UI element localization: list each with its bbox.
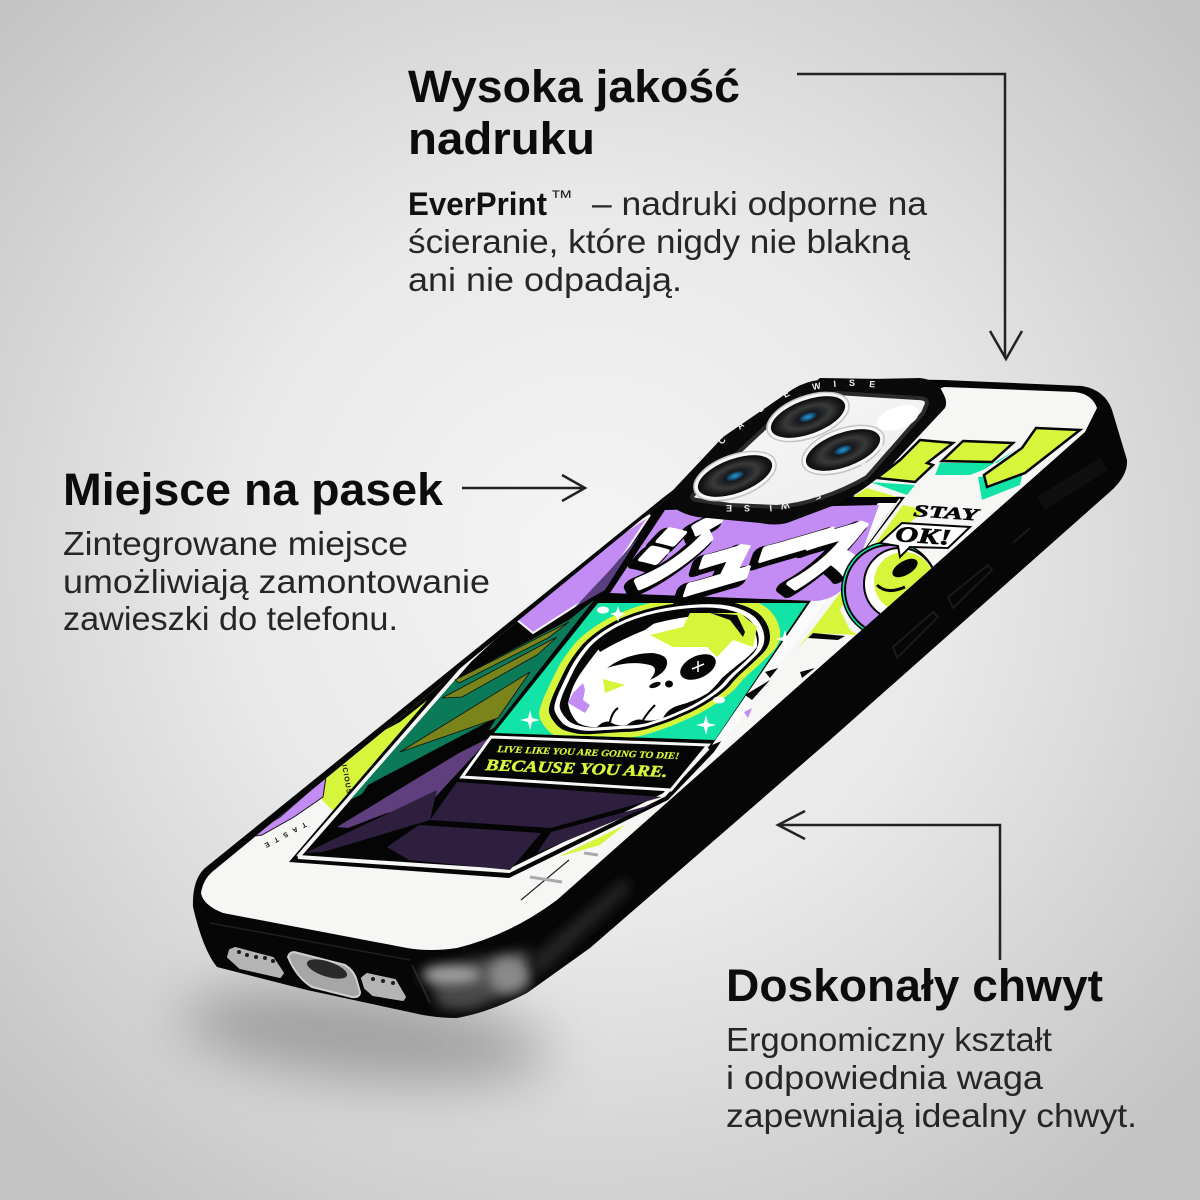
heading: print quality: nadruku (408, 113, 595, 164)
body: print quality: EverPrint (408, 186, 547, 222)
white frame line left (296, 638, 496, 857)
heading: grip: Doskonały chwyt (726, 960, 1103, 1011)
text block: grip (726, 960, 1137, 1134)
olive stripe 1 (455, 622, 569, 683)
slogan line 2: BECAUSE YOU ARE. (483, 757, 669, 781)
nose triangle (603, 679, 625, 693)
skull (539, 595, 780, 740)
arrow: grip (778, 811, 1000, 960)
lime arc under camera (853, 488, 897, 497)
thin frame line right (786, 498, 901, 654)
white ring (554, 604, 764, 731)
case artwork (248, 428, 1080, 900)
charging port (288, 952, 360, 997)
body: print quality (408, 185, 928, 298)
lavender title panel (610, 505, 879, 601)
black band (362, 719, 496, 794)
STAY lettering: STAY (913, 501, 982, 525)
black frame (289, 490, 905, 878)
body: strap slot: Zintegrowane miejsce (63, 525, 408, 562)
wink eye (607, 653, 667, 680)
lens left (687, 442, 783, 510)
lime wedge lower left (322, 674, 453, 811)
lens top (760, 383, 856, 451)
speaker grille left (228, 948, 283, 977)
slogan line 1: LIVE LIKE YOU ARE GOING TO DIE! (495, 745, 680, 762)
case gloss highlight (210, 878, 630, 1010)
glass reflection (874, 400, 922, 436)
heading: print quality (408, 61, 740, 164)
white frame line (298, 748, 708, 871)
cross mark (521, 853, 598, 900)
case body (193, 378, 1127, 1018)
white frame band right (712, 503, 896, 745)
small text TASTE: TASTE (258, 820, 307, 851)
camera ring (669, 378, 946, 524)
lower right comic shape (744, 633, 845, 718)
body: strap slot: zawieszki do telefonu. (63, 600, 398, 637)
nose and teeth (649, 680, 673, 688)
camera bump (669, 378, 946, 524)
body: strap slot (63, 525, 490, 637)
body: grip: zapewniają idealny chwyt. (726, 1097, 1137, 1134)
heading: print quality: Wysoka jakość (408, 61, 740, 112)
black outline (549, 601, 770, 734)
body: print quality: ani nie odpadają. (408, 261, 682, 298)
black inner outline (560, 607, 759, 728)
lime halo (539, 595, 780, 740)
mid purple plate (337, 737, 491, 828)
body: strap slot: umożliwiają zamontowanie (63, 563, 490, 600)
open eye (680, 654, 716, 680)
phone shadow (176, 972, 554, 1098)
lavender cheek (568, 683, 590, 713)
text block: print quality (408, 61, 928, 298)
text block: strap slot (63, 464, 490, 637)
black top arc (598, 624, 654, 652)
phone in case (193, 378, 1127, 1018)
OK speech bubble: OK! (895, 521, 952, 550)
side buttons (893, 458, 1108, 658)
body: grip: Ergonomiczny kształt (726, 1021, 1052, 1058)
speaker grille right (362, 974, 405, 1000)
olive stripe 2 (442, 637, 557, 698)
dark purple plates (305, 782, 662, 870)
japanese title: ジュース (585, 504, 908, 614)
body: grip: i odpowiednia waga (726, 1059, 1044, 1096)
black cranium mark (710, 613, 745, 637)
smiley (841, 541, 939, 639)
lime side block (797, 505, 925, 650)
lavender sliver (517, 515, 650, 633)
arrow: strap slot (462, 475, 585, 501)
arrow: print quality (797, 74, 1022, 359)
brand text upper: CASEWISE (716, 378, 876, 446)
body: print quality: ścieranie, które nigdy nie blakną (408, 223, 911, 260)
japanese title: ジュース (591, 500, 914, 610)
eye glint (692, 661, 704, 672)
brand text lower: CASEWISE (726, 443, 889, 513)
body: grip (726, 1021, 1137, 1134)
body: print quality: ™ (550, 187, 573, 209)
black slogan banner (462, 737, 708, 790)
lavender arc lower left (256, 778, 326, 836)
heading: strap slot: Miejsce na pasek (63, 464, 444, 515)
black bits upper wedge (386, 672, 455, 730)
jaw lines (610, 705, 655, 722)
white skull (568, 615, 757, 727)
OK speech bubble (880, 521, 970, 557)
lime cranium (650, 613, 757, 657)
camera glass (692, 393, 927, 507)
lens right (795, 416, 891, 484)
olive stripe 3 (400, 672, 530, 752)
lime corner lower right (558, 825, 625, 857)
dim purple corner (474, 639, 496, 656)
printed back panel (201, 387, 1097, 950)
teal skull panel (494, 603, 807, 740)
dim purple triangle (575, 535, 640, 607)
lime katakana shapes (870, 428, 1080, 500)
body: print quality: – nadruki odporne na (592, 185, 928, 222)
dark green panel (350, 600, 594, 800)
small text ICIOUS: ICIOUS (340, 764, 352, 795)
sparkles (520, 606, 794, 735)
